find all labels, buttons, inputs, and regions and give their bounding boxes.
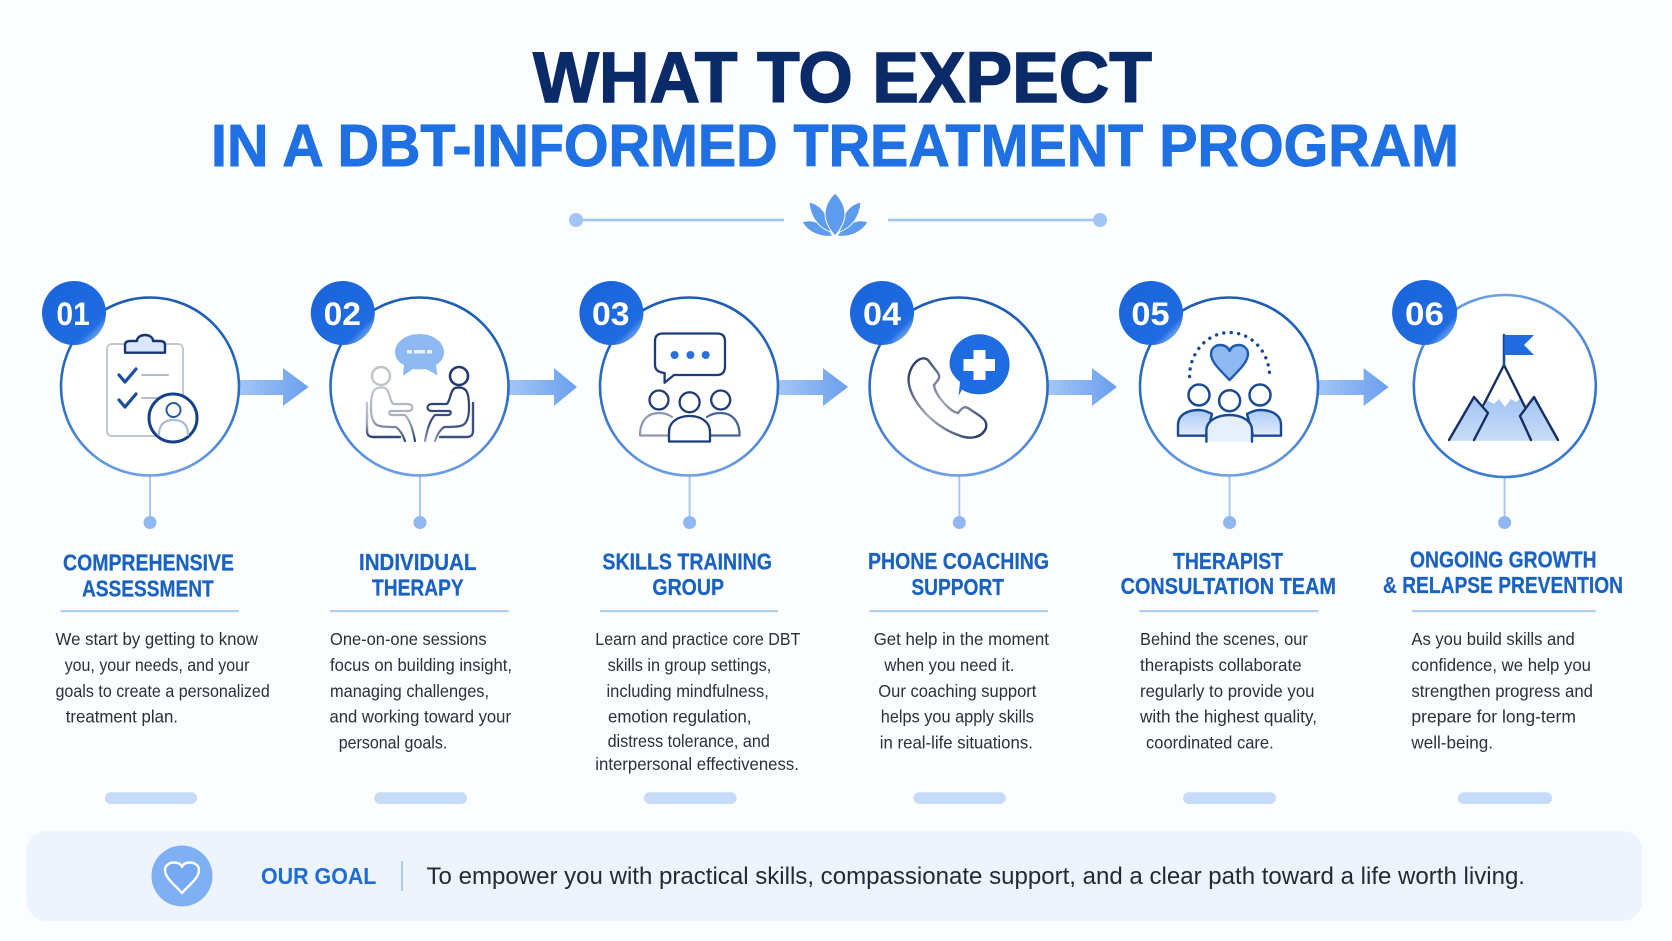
description: including mindfulness,	[606, 681, 769, 701]
heading: SKILLS TRAINING	[602, 548, 772, 574]
description: with the highest quality,	[1139, 707, 1317, 727]
number badge: 03	[592, 296, 630, 332]
description: helps you apply skills	[881, 707, 1034, 727]
panel: step 03 skills training group	[579, 281, 801, 804]
panel: step 04 phone coaching support	[850, 281, 1049, 804]
ring	[600, 298, 778, 476]
goal statement: To empower you with practical skills, compassionate support, and a clear path toward a life worth living.	[426, 863, 1525, 890]
heading: SUPPORT	[911, 574, 1004, 600]
stem connector	[144, 476, 156, 529]
icon: heart	[152, 846, 212, 906]
description: personal goals.	[339, 732, 447, 752]
stem connector	[953, 476, 966, 529]
stem connector	[1498, 476, 1511, 529]
description: treatment plan.	[66, 707, 178, 727]
ring	[1140, 298, 1318, 476]
icon: clipboard with checklist and person	[107, 335, 197, 442]
description	[874, 629, 1049, 752]
panel: step 06 ongoing growth and relapse prevention	[1383, 280, 1623, 804]
description	[595, 629, 801, 774]
icon: two people talking	[367, 334, 473, 441]
description: when you need it.	[883, 655, 1014, 675]
description: distress tolerance, and	[608, 731, 770, 751]
number badge: 01	[56, 296, 90, 332]
ring	[870, 298, 1048, 476]
heading: & RELAPSE PREVENTION	[1383, 572, 1623, 598]
icon: phone with medical chat bubble	[909, 334, 1010, 438]
panel: step 05 therapist consultation team	[1119, 281, 1336, 804]
heading: THERAPY	[372, 575, 464, 601]
heading: COMPREHENSIVE	[63, 550, 234, 576]
number badge	[579, 281, 643, 345]
heading: PHONE COACHING	[868, 548, 1049, 574]
number badge	[1119, 281, 1183, 345]
heading: THERAPIST	[1173, 548, 1283, 574]
stem connector	[683, 476, 696, 529]
arrow: step 3 to 4	[779, 368, 848, 406]
icon: lotus	[802, 193, 868, 236]
description	[1139, 629, 1317, 752]
stem connector	[414, 476, 426, 529]
ring	[61, 298, 239, 476]
panel: step 02 individual therapy	[311, 281, 512, 804]
number badge	[850, 281, 914, 345]
title	[211, 39, 1459, 179]
title divider with lotus icon	[569, 193, 1107, 236]
heading	[1121, 548, 1336, 599]
description: Behind the scenes, our	[1140, 629, 1308, 649]
description: interpersonal effectiveness.	[595, 754, 799, 774]
description: managing challenges,	[330, 681, 489, 701]
heading	[359, 549, 476, 601]
description: goals to create a personalized	[56, 681, 270, 701]
panel: our goal banner	[27, 831, 1642, 921]
description: As you build skills and	[1411, 629, 1575, 649]
description: We start by getting to know	[56, 629, 258, 649]
arrow: step 4 to 5	[1048, 368, 1117, 406]
panel: step 01 comprehensive assessment	[42, 281, 270, 804]
description: skills in group settings,	[608, 655, 771, 675]
number badge: 04	[863, 296, 901, 332]
description: Learn and practice core DBT	[595, 629, 801, 649]
description	[330, 629, 512, 752]
goal label: OUR GOAL	[261, 863, 376, 889]
heading	[868, 548, 1049, 600]
description: in real-life situations.	[880, 732, 1033, 752]
description	[1410, 629, 1593, 752]
heading: INDIVIDUAL	[359, 549, 476, 575]
heading: ASSESSMENT	[82, 576, 214, 602]
description: confidence, we help you	[1411, 655, 1591, 675]
number badge: 05	[1131, 296, 1170, 332]
number badge: 06	[1405, 296, 1444, 332]
icon: mountain with flag	[1449, 335, 1558, 441]
description: emotion regulation,	[608, 707, 751, 727]
ring	[330, 298, 508, 476]
heading: GROUP	[652, 574, 724, 600]
heading	[63, 550, 234, 602]
description: Get help in the moment	[874, 629, 1049, 649]
heading: CONSULTATION TEAM	[1121, 573, 1336, 599]
description: One-on-one sessions	[330, 629, 487, 649]
description: focus on building insight,	[330, 655, 512, 675]
description: strengthen progress and	[1411, 681, 1593, 701]
description: Our coaching support	[878, 681, 1037, 701]
heading: ONGOING GROWTH	[1410, 547, 1597, 573]
number badge	[42, 281, 106, 345]
title line 2: IN A DBT-INFORMED TREATMENT PROGRAM	[211, 113, 1459, 179]
description: well-being.	[1410, 732, 1493, 752]
heading	[602, 548, 772, 600]
arrow: step 1 to 2	[239, 368, 309, 406]
number badge: 02	[324, 296, 361, 332]
description: therapists collaborate	[1140, 655, 1302, 675]
description	[56, 629, 270, 727]
heading	[1383, 547, 1623, 598]
description: regularly to provide you	[1140, 681, 1314, 701]
stem connector	[1223, 476, 1236, 529]
description: and working toward your	[330, 707, 511, 727]
arrow: step 5 to 6	[1318, 368, 1389, 406]
icon: group with speech bubble	[640, 334, 740, 442]
description: prepare for long-term	[1411, 707, 1576, 727]
icon: team with heart	[1178, 332, 1281, 442]
ring	[1414, 295, 1596, 477]
number badge	[1392, 280, 1457, 345]
arrow: step 2 to 3	[509, 368, 577, 406]
description: you, your needs, and your	[65, 655, 250, 675]
title line 1: WHAT TO EXPECT	[533, 39, 1152, 118]
number badge	[311, 281, 375, 345]
description: coordinated care.	[1146, 732, 1274, 752]
